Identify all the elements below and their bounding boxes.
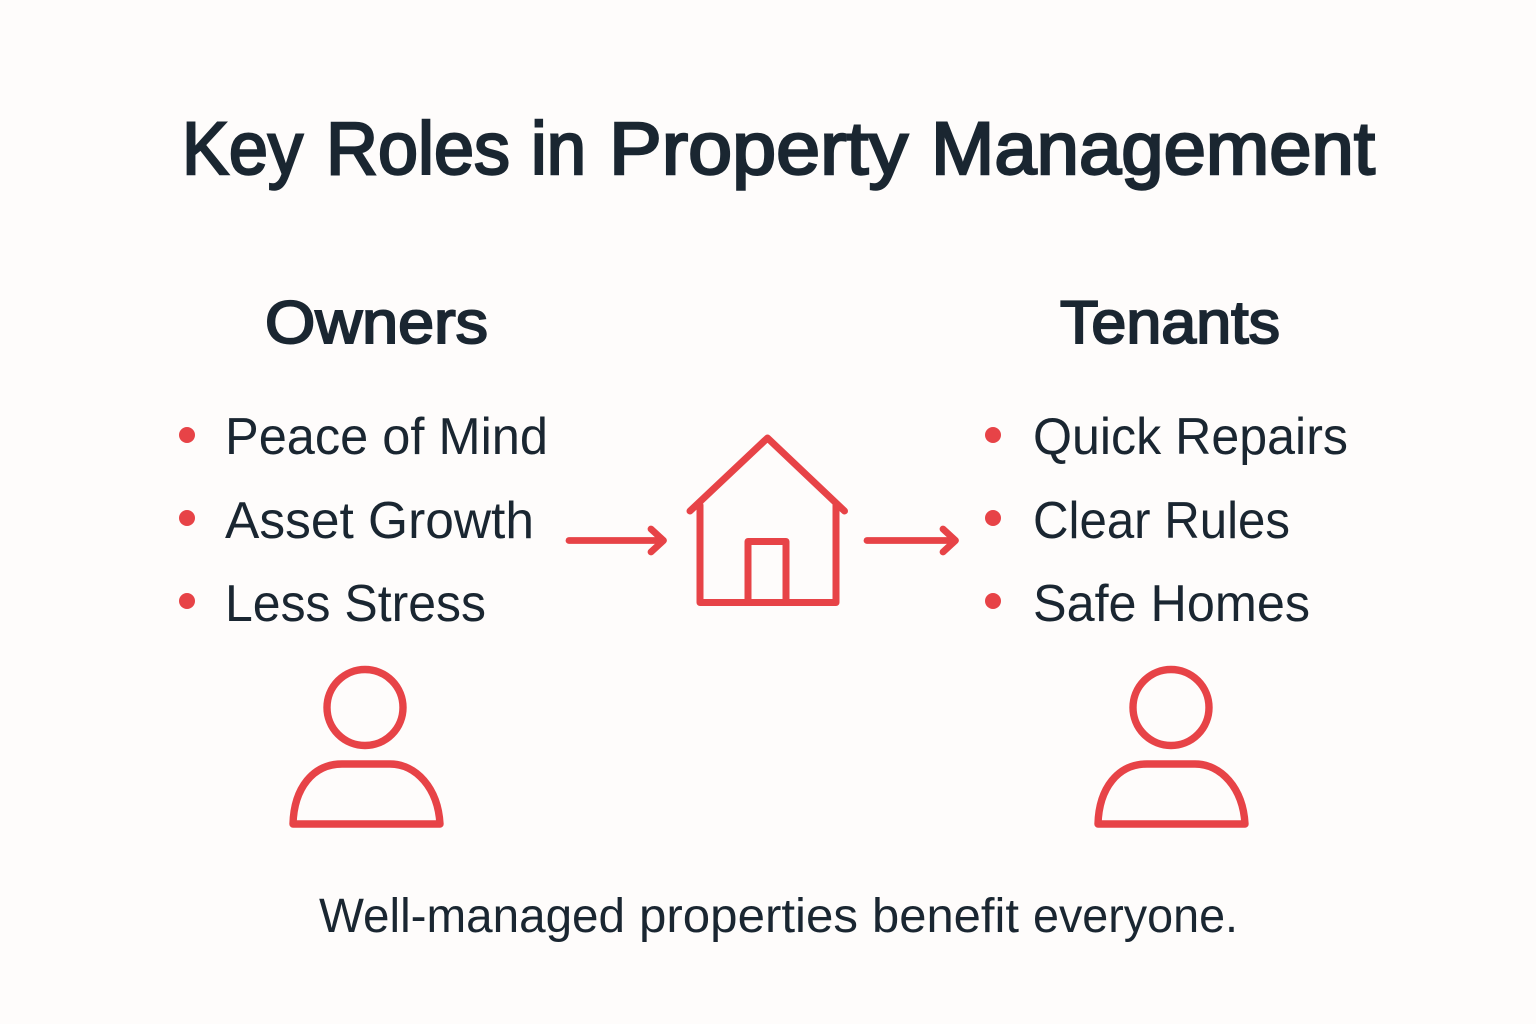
title: Roles xyxy=(326,107,510,190)
title: Management xyxy=(931,107,1375,190)
footer tagline: properties xyxy=(639,890,858,943)
footer tagline: benefit xyxy=(872,890,1019,943)
arrow: owners to house xyxy=(569,529,664,552)
tenants list xyxy=(985,408,1348,633)
title xyxy=(182,107,1375,190)
arrow: house to tenants xyxy=(867,529,956,552)
title: in xyxy=(531,107,586,190)
footer tagline: everyone. xyxy=(1033,890,1238,943)
owners list xyxy=(179,408,548,633)
owners list: Asset Growth xyxy=(225,492,534,550)
tenants list: Quick Repairs xyxy=(1033,408,1348,466)
title: Key xyxy=(182,107,303,190)
owners list: Less Stress xyxy=(225,575,486,633)
panel: tenants xyxy=(985,289,1348,824)
owners heading: Owners xyxy=(265,289,488,356)
icon: house xyxy=(690,438,844,602)
tenants list: Safe Homes xyxy=(1033,575,1310,633)
footer tagline: Well-managed xyxy=(319,890,625,943)
footer tagline xyxy=(319,890,1238,943)
tenants heading: Tenants xyxy=(1060,289,1280,356)
owners list: Peace of Mind xyxy=(225,408,548,466)
icon: tenant person xyxy=(1098,670,1245,824)
icon: owner person xyxy=(293,670,440,824)
tenants list: Clear Rules xyxy=(1033,492,1290,550)
panel: owners xyxy=(179,289,548,824)
title: Property xyxy=(609,107,908,190)
